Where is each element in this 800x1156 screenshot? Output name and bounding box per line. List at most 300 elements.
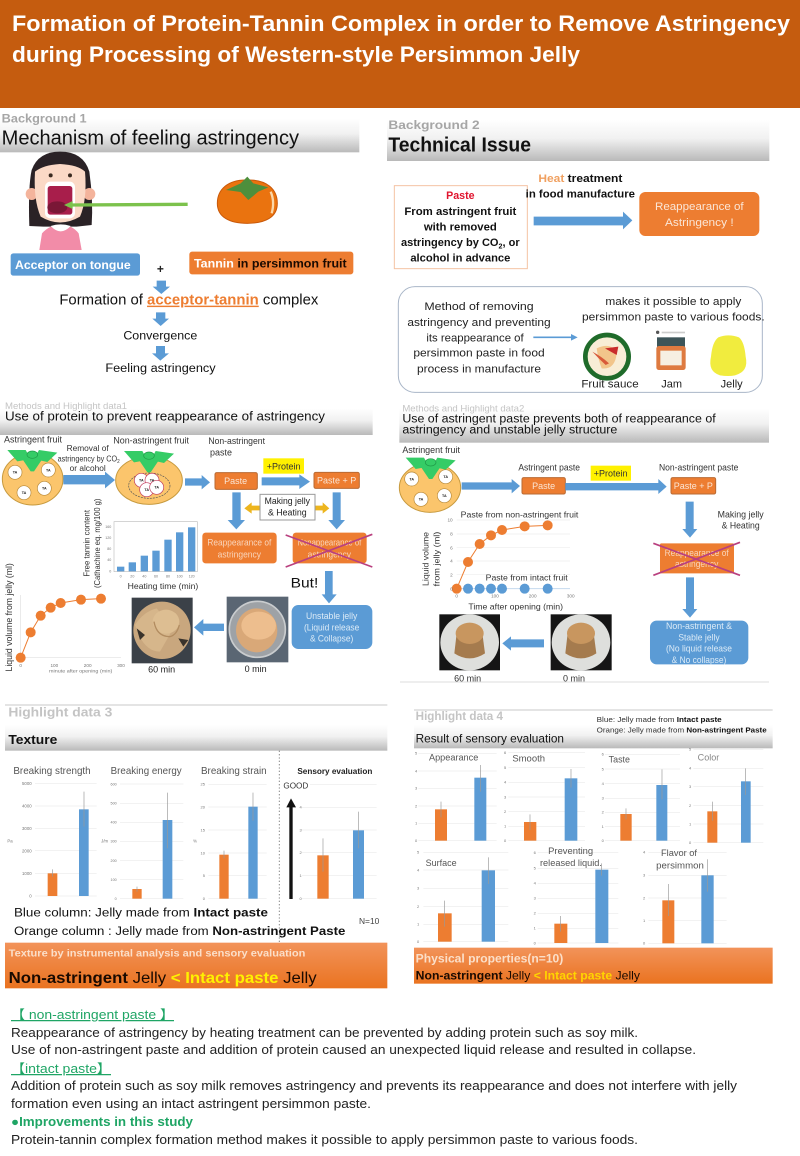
banner: physical properties conclusion: Physical properties(n=10) <box>416 951 563 965</box>
chart: liquid volume two pastes: 300 <box>567 593 575 598</box>
chart: smooth: 2 <box>504 809 507 814</box>
label: non-astringent paste: paste <box>210 447 232 457</box>
box: non-astringent stable jelly: Non-astringent & <box>666 621 733 631</box>
box: paste: Paste <box>224 476 247 486</box>
heading: technical issue: Technical Issue <box>388 135 531 157</box>
text: making jelly and heating <box>718 509 764 530</box>
arrow: down 1 <box>153 281 170 294</box>
icon: non-astringent fruit: TA <box>144 488 149 492</box>
panel: methods and highlight data 1 <box>0 401 373 675</box>
chart: liquid volume two pastes: 2 <box>450 572 453 577</box>
chart: smooth: 0 <box>504 838 507 843</box>
text: heat treatment: in food manufacture <box>526 189 635 201</box>
banner: physical properties conclusion: Non-astringent Jelly < Intact paste Jelly <box>416 969 640 982</box>
chart: breaking strain: 10 <box>201 850 206 855</box>
chart: liquid volume two pastes: Paste from intact fruit <box>486 573 568 583</box>
box: paste plus P <box>314 472 359 488</box>
chart: liquid volume from jelly: minute after opening (min) <box>49 668 113 673</box>
label: tannin in persimmon fruit: Tannin in persimmon fruit <box>194 256 347 270</box>
chart: free tannin content: 120 <box>189 575 195 579</box>
chart: breaking energy: 400 <box>111 821 117 825</box>
chart: breaking strength: 0 <box>29 894 32 899</box>
box: unstable jelly: (Liquid release <box>304 622 359 632</box>
label: 0 min: 0 min <box>245 664 267 674</box>
text: making jelly and heating: & Heating <box>722 520 760 530</box>
heading: use of astringent paste: astringency and unstable jelly structure <box>402 423 617 437</box>
icon: astringent fruit <box>2 450 63 505</box>
box: making jelly and heating: & Heating <box>268 507 307 517</box>
panel: background 2 technical issue <box>387 118 769 392</box>
box: non-astringent stable jelly: (No liquid release <box>666 644 732 654</box>
chart: appearance: 2 <box>415 803 418 808</box>
text: removal of astringency <box>58 443 120 473</box>
arrow: down to stable jelly <box>682 577 697 618</box>
chart: taste: 3 <box>602 796 605 801</box>
label: non-astringent fruit: Non-astringent fruit <box>113 435 189 445</box>
banner: texture conclusion: Non-astringent Jelly < Intact paste Jelly <box>9 970 317 987</box>
text: removal of astringency: astringency by CO <box>58 453 126 463</box>
label: non-astringent paste <box>208 436 265 457</box>
chart: smooth <box>504 750 585 843</box>
text: formation of complex: Formation of acceptor-tannin complex <box>59 293 319 309</box>
box: unstable jelly: Unstable jelly <box>306 611 358 621</box>
chart: breaking strain: 25 <box>201 782 206 787</box>
box: unstable jelly <box>292 605 372 649</box>
box: paste: Paste <box>532 481 555 491</box>
heading: methods label: Methods and Highlight data2 <box>402 403 524 413</box>
box: unstable jelly: & Collapse) <box>310 634 353 644</box>
chart: taste: Taste <box>609 755 630 765</box>
chart: appearance <box>415 751 497 843</box>
photo: stable jelly at 0 min <box>551 614 612 670</box>
chart: liquid volume from jelly <box>4 563 125 673</box>
plus sign: + <box>157 262 164 276</box>
chart: taste: 4 <box>602 781 605 786</box>
icon: astringent fruit: TA <box>443 475 448 479</box>
box: making jelly and heating <box>260 494 315 520</box>
box: paste description <box>394 186 527 269</box>
legend: column colours <box>14 906 346 938</box>
panel: highlight data 4 sensory evaluation <box>414 709 773 984</box>
chart: taste: 1 <box>602 824 605 829</box>
text block: conclusions <box>11 1008 738 1147</box>
label: plus protein <box>263 458 304 474</box>
text: reappearance prevented: Reappearance of astringency by heating treatment can be prevented by adding protein such as soy milk. <box>11 1026 638 1040</box>
arrow: down to unstable jelly <box>322 571 337 603</box>
box: reappearance of astringency <box>639 192 759 236</box>
chart: sensory evaluation <box>283 766 377 901</box>
chart: liquid volume two pastes: 8 <box>450 532 453 537</box>
chart: color: Color <box>698 752 719 762</box>
arrow: down 3 <box>152 346 169 361</box>
legend: column colours: Orange column : Jelly made from Non-astringent Paste <box>14 924 346 938</box>
box: paste description: Paste <box>446 190 475 202</box>
banner: texture conclusion <box>5 943 387 988</box>
icon: astringent fruit: TA <box>442 494 447 498</box>
text: removal of astringency: 2 <box>117 459 120 465</box>
chart: flavor of persimmon: 2 <box>643 895 646 900</box>
icon: non-astringent fruit: TA <box>154 486 159 490</box>
arrow: 0 min to 60 min <box>502 636 544 651</box>
arrows: yellow heating <box>244 502 329 514</box>
chart: smooth: 1 <box>504 824 507 829</box>
chart: smooth: 4 <box>504 780 507 785</box>
chart: color: 4 <box>689 766 692 771</box>
chart: liquid volume two pastes: 6 <box>450 545 453 550</box>
chart: sensory evaluation: 2 <box>299 850 302 855</box>
icon: girl with open mouth <box>26 152 95 250</box>
icon: astringent fruit <box>399 458 461 512</box>
text: method of removing astringency: its reappearance of <box>426 333 525 345</box>
arrow: paste down <box>228 492 245 529</box>
chart: color: 3 <box>689 784 692 789</box>
chart: color: 5 <box>689 747 692 752</box>
box: reappearance crossed out: Reappearance of <box>665 548 729 558</box>
chart: preventing released liquid: 3 <box>534 896 537 901</box>
heading: highlight data 3: Highlight data 3 <box>8 706 112 720</box>
box: non-astringent stable jelly: Stable jelly <box>678 632 720 642</box>
chart: breaking strain: 20 <box>201 804 206 809</box>
chart: preventing released liquid: 0 <box>534 940 537 945</box>
arrow: down to crossed box <box>682 502 697 538</box>
heading: use of astringent paste <box>402 411 716 437</box>
icon: astringent fruit: TA <box>409 477 414 481</box>
legend: colours <box>597 715 767 735</box>
label: plus protein: +Protein <box>594 469 628 479</box>
icon: fruit sauce <box>585 335 629 378</box>
chart: breaking energy: 200 <box>111 859 117 863</box>
chart: sensory evaluation: Sensory evaluation <box>297 766 372 776</box>
chart: preventing released liquid: 6 <box>534 850 537 855</box>
heading: use of protein: Use of protein to prevent reappearance of astringency <box>5 409 325 424</box>
chart: sensory evaluation: GOOD <box>283 781 308 791</box>
box: reappearance of astringency <box>202 533 277 563</box>
chart: liquid volume from jelly: Liquid volume from jelly (ml) <box>4 563 14 671</box>
arrow: paste to reappearance <box>534 212 632 229</box>
chart: breaking energy: 100 <box>111 878 117 882</box>
chart: preventing released liquid: released liquid. <box>540 858 602 868</box>
photo: jelly at 0 min <box>227 597 288 662</box>
labels: food names: Fruit sauce <box>581 378 639 390</box>
text: method of removing astringency <box>407 301 551 375</box>
panel: application to foods <box>398 287 765 392</box>
chart: breaking energy: J/m <box>101 839 109 844</box>
icon: jam jar <box>656 331 686 370</box>
chart: sensory evaluation: 3 <box>299 827 302 832</box>
labels: food names <box>581 378 743 390</box>
chart: appearance: 1 <box>415 821 418 826</box>
chart: surface: 1 <box>417 922 420 927</box>
panel: background 1 mechanism <box>0 111 359 375</box>
chart: breaking energy: 300 <box>111 840 117 844</box>
heading: methods label: Methods and Highlight data1 <box>5 401 127 411</box>
chart: smooth: Smooth <box>512 754 545 764</box>
chart: free tannin content: 80 <box>107 547 111 551</box>
label: 60 min: 60 min <box>454 674 481 684</box>
chart: preventing released liquid: 2 <box>534 911 537 916</box>
box: reappearance crossed out: astringency <box>675 559 719 569</box>
text: but: But! <box>291 575 318 591</box>
title banner: Formation of Protein-Tannin Complex in order to Remove Astringency <box>12 11 791 36</box>
note: n equals 10: N=10 <box>359 916 380 926</box>
chart: breaking energy: Breaking energy <box>111 766 182 777</box>
chart: color: 0 <box>689 840 692 845</box>
text: unexpected liquid release: Use of non-astringent paste and addition of protein caused an unexpected liquid release and resulted in collapse. <box>11 1043 696 1057</box>
title banner <box>0 0 800 108</box>
chart: flavor of persimmon <box>643 848 727 946</box>
chart: liquid volume two pastes: 100 <box>491 593 499 598</box>
text: makes it possible: makes it possible to apply <box>605 296 742 308</box>
chart: breaking strength: 4000 <box>22 804 32 809</box>
chart: surface: 3 <box>417 886 420 891</box>
chart: color <box>689 747 763 845</box>
chart: surface: 4 <box>417 867 420 872</box>
arrow: fruit to paste <box>185 475 210 489</box>
text: addition of protein: Addition of protein such as soy milk removes astringency and prevents its reappearance and does not interfere with jelly <box>11 1079 738 1093</box>
chart: breaking strain: 5 <box>203 873 206 878</box>
chart: appearance: Appearance <box>429 753 478 763</box>
box: reappearance of astringency: Reappearance of <box>655 201 745 213</box>
banner: texture conclusion: Texture by instrumental analysis and sensory evaluation <box>9 949 305 960</box>
chart: preventing released liquid <box>534 846 618 945</box>
label: non-astringent paste: Non-astringent paste <box>659 463 738 473</box>
chart: free tannin content: Free tannin content <box>81 509 91 577</box>
heading: background 2: Background 2 <box>388 118 480 132</box>
chart: free tannin content: 0 <box>109 569 111 573</box>
chart: flavor of persimmon: 4 <box>643 850 646 855</box>
arrow: down 2 <box>152 312 169 326</box>
chart: flavor of persimmon: 3 <box>643 873 646 878</box>
icon: astringent fruit: TA <box>42 487 47 491</box>
chart: surface: 5 <box>417 850 420 855</box>
icon: astringent fruit: TA <box>46 468 51 472</box>
chart: breaking energy <box>101 766 183 901</box>
text: method of removing astringency: process in manufacture <box>417 363 541 375</box>
chart: smooth: 5 <box>504 765 507 770</box>
label: non-astringent paste: Non-astringent <box>208 436 265 446</box>
chart: breaking strength: 3000 <box>22 826 32 831</box>
text: formation with intact paste: formation even using an intact astringent persimmon paste. <box>11 1097 371 1111</box>
chart: free tannin content: 20 <box>130 575 134 579</box>
chart: surface: 0 <box>417 939 420 944</box>
chart: smooth: 3 <box>504 794 507 799</box>
label: astringent fruit: Astringent fruit <box>402 445 460 455</box>
chart: preventing released liquid: Preventing <box>548 846 593 856</box>
chart: breaking strain: 15 <box>201 827 206 832</box>
panel: highlight data 3 texture <box>5 705 387 988</box>
text: method of removing astringency: astringency and preventing <box>407 317 551 329</box>
arrow: paste+P down <box>328 492 345 529</box>
box: non-appearance crossed out: astringency <box>308 549 351 559</box>
chart: free tannin content: 120 <box>105 536 111 540</box>
chart: breaking strength <box>7 766 97 899</box>
heading: intact paste: 【intact paste】 <box>11 1062 111 1076</box>
chart: liquid volume from jelly: 100 <box>50 663 59 668</box>
chart: breaking strain: Breaking strain <box>201 766 267 777</box>
box: non-appearance crossed out: Nonappearance of <box>297 538 362 548</box>
box: reappearance of astringency: Reappearance of <box>207 538 272 548</box>
chart: taste <box>602 752 680 843</box>
box: non-astringent stable jelly: & No collapse) <box>672 655 726 665</box>
heading: mechanism: Mechanism of feeling astringency <box>2 127 299 149</box>
photo: stable jelly at 60 min <box>439 614 500 670</box>
heading: texture: Texture <box>8 732 57 747</box>
icon: non-astringent fruit: TA <box>139 479 144 483</box>
chart: liquid volume two pastes: Time after opening (min) <box>468 601 563 611</box>
box: non-astringent stable jelly <box>650 621 748 665</box>
chart: liquid volume from jelly: 200 <box>84 663 92 668</box>
icon: persimmon <box>217 177 277 223</box>
chart: liquid volume two pastes: Paste from non-astringent fruit <box>461 509 579 519</box>
box: paste description: From astringent fruit <box>404 206 517 218</box>
icon: astringent fruit: TA <box>22 491 27 495</box>
chart: appearance: 3 <box>415 786 418 791</box>
chart: breaking strength: 2000 <box>22 848 32 853</box>
box: paste description: alcohol in advance <box>410 253 510 265</box>
chart: smooth: 6 <box>504 750 507 755</box>
chart: liquid volume two pastes: Liquid volume <box>421 532 431 586</box>
arrow: fruit to paste <box>462 479 520 493</box>
chart: appearance: 4 <box>415 768 418 773</box>
label: astringent paste: Astringent paste <box>518 463 580 473</box>
box: making jelly and heating: Making jelly <box>265 496 310 506</box>
box: paste <box>522 478 565 494</box>
box: paste plus P: Paste + P <box>317 476 356 486</box>
text: feeling astringency: Feeling astringency <box>105 361 217 375</box>
icon: astringent fruit: TA <box>13 471 18 475</box>
legend: colours: Orange: Jelly made from Non-astringent Paste <box>597 726 767 735</box>
chart: free tannin content: 40 <box>142 575 146 579</box>
chart: taste: 5 <box>602 766 605 771</box>
chart: free tannin content: 0 <box>120 575 122 579</box>
box: paste description: with removed <box>423 222 497 234</box>
chart: liquid volume two pastes: from jelly (ml) <box>432 532 442 586</box>
label: 0 min: 0 min <box>563 674 585 684</box>
chart: flavor of persimmon: 1 <box>643 918 646 923</box>
arrow: method to foods <box>533 334 578 341</box>
chart: appearance: 5 <box>415 751 418 756</box>
chart: breaking strength: 1000 <box>22 871 32 876</box>
label: acceptor on tongue: Acceptor on tongue <box>15 258 131 272</box>
box: paste <box>215 473 257 489</box>
arrow: persimmon to tongue <box>64 201 188 209</box>
chart: free tannin content: 100 <box>177 575 183 579</box>
text: method of removing astringency: persimmon paste in food <box>413 348 545 360</box>
arrow: good direction <box>286 798 296 899</box>
chart: taste: 6 <box>602 752 605 757</box>
chart: free tannin content: Heating time (min) <box>128 581 198 591</box>
banner: physical properties conclusion <box>414 948 773 984</box>
box: paste description: , or <box>502 237 520 249</box>
text: heat treatment: Heat treatment <box>538 173 623 185</box>
chart: free tannin content: 60 <box>154 575 158 579</box>
chart: breaking energy: 600 <box>111 782 117 786</box>
chart: breaking strain: 0 <box>203 896 206 901</box>
labels: food names: Jam <box>661 378 682 390</box>
text: removal of astringency: or alcohol <box>70 463 106 473</box>
labels: food names: Jelly <box>721 378 743 390</box>
chart: liquid volume two pastes: 0 <box>450 586 453 591</box>
heading: non-astringent paste: 【 non-astringent paste 】 <box>11 1008 174 1022</box>
chart: liquid volume two pastes <box>421 509 579 611</box>
heading: improvements in this study: ●Improvements in this study <box>11 1115 193 1129</box>
text: making jelly and heating: Making jelly <box>718 509 764 519</box>
label: acceptor on tongue <box>11 253 140 276</box>
heading: result of sensory evaluation: Result of sensory evaluation <box>416 732 564 745</box>
chart: flavor of persimmon: persimmon <box>656 861 704 871</box>
chart: free tannin content: (Cathachine eq. mg/100 g) <box>92 499 102 588</box>
chart: taste: 0 <box>602 838 605 843</box>
chart: free tannin content: 160 <box>105 525 111 529</box>
text: makes it possible: persimmon paste to various foods. <box>582 312 765 324</box>
text: makes it possible <box>582 296 765 324</box>
icon: non-astringent fruit <box>116 451 182 504</box>
chart: taste: 2 <box>602 810 605 815</box>
box: paste description: 2 <box>499 241 502 250</box>
text: convergence: Convergence <box>123 328 197 342</box>
chart: sensory evaluation: 1 <box>299 873 302 878</box>
photo: collapsed jelly at 60 min <box>132 598 193 663</box>
legend: column colours: Blue column: Jelly made from Intact paste <box>14 906 268 920</box>
box: paste plus P: Paste + P <box>674 481 713 491</box>
chart: liquid volume two pastes: 200 <box>529 593 537 598</box>
box: non-appearance crossed out <box>286 533 372 567</box>
arrow: paste to paste+P <box>565 479 667 494</box>
chart: color: 2 <box>689 803 692 808</box>
icon: astringent fruit: TA <box>419 498 424 502</box>
chart: surface <box>417 850 508 944</box>
box: reappearance of astringency: Astringency ! <box>665 217 734 229</box>
chart: preventing released liquid: 5 <box>534 866 537 871</box>
chart: preventing released liquid: 4 <box>534 881 537 886</box>
legend: colours: Blue: Jelly made from Intact paste <box>597 715 722 724</box>
heading: use of astringent paste: Use of astringent paste prevents both of reappearance of <box>402 411 716 425</box>
label: tannin in persimmon fruit <box>189 252 353 274</box>
chart: free tannin content: 40 <box>107 558 111 562</box>
box: reappearance crossed out <box>653 542 740 575</box>
chart: breaking energy: 0 <box>115 897 117 901</box>
chart: liquid volume from jelly: 300 <box>117 663 125 668</box>
chart: liquid volume from jelly: 0 <box>19 663 22 668</box>
chart: sensory evaluation: 4 <box>299 805 302 810</box>
text: method of removing astringency: Method of removing <box>424 301 534 313</box>
chart: surface: Surface <box>426 858 457 868</box>
icon: non-astringent fruit: TA <box>150 479 155 483</box>
panel: methods and highlight data 2 <box>399 403 769 684</box>
title banner: during Processing of Western-style Persimmon Jelly <box>12 42 581 67</box>
chart: appearance: 0 <box>415 838 418 843</box>
chart: surface: 2 <box>417 904 420 909</box>
box: paste description: astringency by CO <box>401 237 501 249</box>
chart: free tannin content: 80 <box>166 575 170 579</box>
icon: jelly <box>710 335 746 376</box>
chart: breaking strength: Breaking strength <box>13 766 91 777</box>
chart: breaking strength: 5000 <box>22 781 32 786</box>
arrow: paste to paste+P <box>262 474 310 489</box>
chart: flavor of persimmon: Flavor of <box>661 848 698 858</box>
chart: preventing released liquid: 1 <box>534 926 537 931</box>
heading: highlight data 4: Highlight data 4 <box>416 709 503 723</box>
chart: liquid volume two pastes: 10 <box>447 518 453 523</box>
chart: breaking strain: % <box>193 839 197 844</box>
chart: sensory evaluation: 0 <box>299 896 302 901</box>
chart: breaking energy: 500 <box>111 802 117 806</box>
text: removal of astringency: Removal of <box>67 443 109 453</box>
label: plus protein <box>591 466 631 481</box>
chart: color: 1 <box>689 821 692 826</box>
box: paste plus P <box>671 478 716 494</box>
chart: liquid volume two pastes: 0 <box>455 593 458 598</box>
